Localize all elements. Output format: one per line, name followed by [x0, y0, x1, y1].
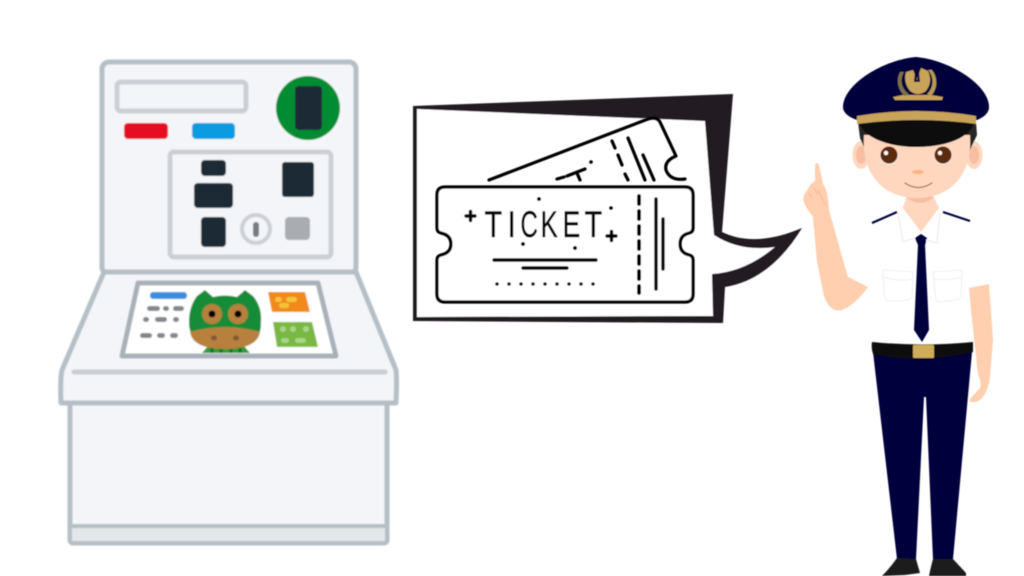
- ticket label: K: [540, 203, 558, 245]
- green card reader: [276, 76, 340, 140]
- speech bubble: [413, 94, 802, 323]
- machine upper panel: [102, 62, 356, 274]
- ticket label: E: [562, 204, 580, 245]
- tie: [914, 234, 929, 342]
- cap band: [857, 111, 976, 124]
- conductor character: [803, 57, 993, 576]
- display window: [117, 82, 246, 111]
- left arm and hand: [803, 163, 868, 310]
- control sub-panel: [170, 152, 331, 257]
- smile: [905, 183, 932, 188]
- machine base: [70, 400, 387, 543]
- right shoe: [929, 559, 966, 576]
- cap crown: [843, 57, 989, 120]
- cap badge: [893, 68, 943, 100]
- belt: [872, 342, 973, 359]
- orange panel: [268, 292, 310, 312]
- nose: [912, 170, 924, 174]
- touch screen: [122, 283, 336, 356]
- belt buckle: [913, 345, 934, 358]
- back ticket: [489, 118, 685, 180]
- trousers: [873, 352, 972, 559]
- shirt pockets: [883, 270, 962, 301]
- red button: [124, 123, 168, 139]
- ears: [852, 141, 982, 169]
- hair: [858, 122, 977, 152]
- ticket label: T: [484, 205, 502, 246]
- cap visor: [858, 120, 975, 147]
- green panel: [273, 322, 318, 347]
- collar: [898, 213, 940, 243]
- epaulettes: [872, 212, 970, 223]
- blue button: [192, 123, 235, 139]
- ticket label: [484, 203, 602, 246]
- ticket machine: [61, 62, 397, 543]
- ticket label: C: [520, 204, 538, 245]
- ticket label: T: [584, 205, 602, 246]
- front ticket: [437, 187, 693, 302]
- machine console: [61, 272, 397, 403]
- ticket label: I: [508, 205, 516, 246]
- eyes: [880, 146, 952, 165]
- face: [864, 135, 970, 198]
- mascot character: [189, 290, 261, 353]
- neck: [903, 195, 939, 232]
- left shoe: [882, 558, 920, 576]
- plus marks: [466, 212, 616, 240]
- right arm: [969, 284, 993, 402]
- ticket illustration: [437, 118, 693, 302]
